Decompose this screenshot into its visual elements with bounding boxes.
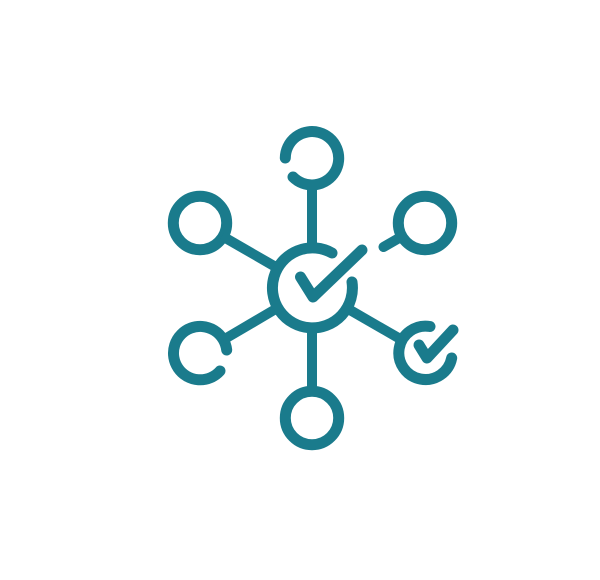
- bottom node with connector: [285, 332, 339, 445]
- upper left node with connector: [173, 196, 274, 266]
- top node with connector: [285, 132, 339, 244]
- lower left node with connector: [173, 310, 274, 380]
- upper right node with broken connector: [384, 196, 452, 250]
- central hub with check mark: [272, 248, 362, 328]
- lower right node with check mark and connector: [350, 310, 453, 380]
